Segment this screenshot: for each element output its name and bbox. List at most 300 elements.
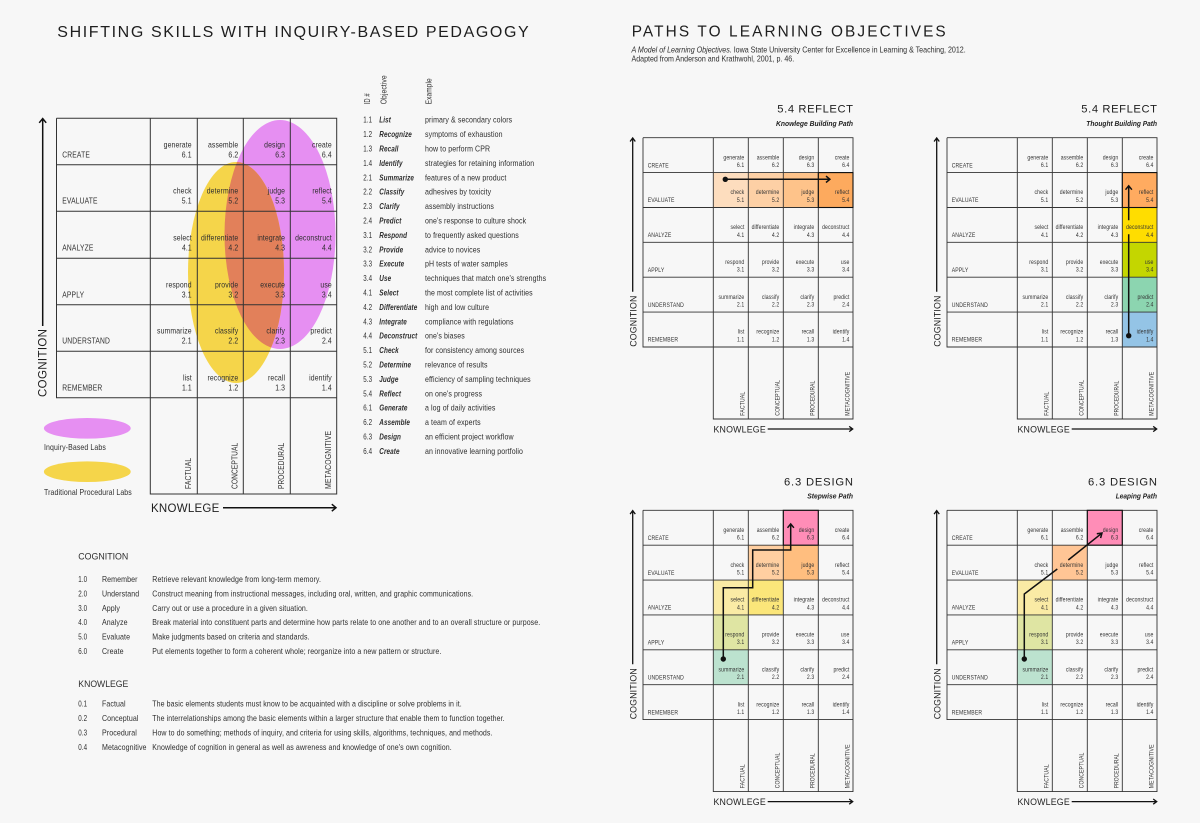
column: id numbers: 6.1 <box>363 403 372 413</box>
row: understand: 2.3 <box>275 336 286 346</box>
grid labels: ANALYZE <box>648 605 671 612</box>
grid labels: 6.3 <box>807 163 814 169</box>
column: objectives: Recall <box>379 144 399 154</box>
grid labels: recognize <box>756 329 779 336</box>
grid labels: FACTUAL <box>739 391 746 416</box>
row: analyze: 4.4 <box>322 243 332 253</box>
grid labels: select <box>731 225 744 231</box>
grid labels: list <box>1042 329 1048 336</box>
grid labels: determine <box>756 190 779 196</box>
grid labels: provide <box>762 259 779 266</box>
grid labels: 5.2 <box>772 197 779 204</box>
column: id numbers <box>363 115 372 456</box>
grid labels: use <box>841 632 849 639</box>
knowlege descriptions: The basic elements students must know to be acquainted with a discipline or solve problems in it. <box>152 699 462 709</box>
cognition ids: 3.0 <box>78 603 87 613</box>
row: remember: recall <box>268 373 285 383</box>
grid labels: 5.1 <box>737 570 744 577</box>
column: objectives: Select <box>379 288 399 298</box>
grid labels: METACOGNITIVE <box>844 744 851 788</box>
grid labels: PROCEDURAL <box>809 380 816 416</box>
highlighted cells <box>1017 510 1122 685</box>
grid labels: METACOGNITIVE <box>1148 371 1155 416</box>
grid labels: 1.2 <box>772 710 779 716</box>
grid labels: identify <box>1137 329 1153 336</box>
column: examples: strategies for retaining information <box>425 158 534 168</box>
row: create: 6.1 <box>182 150 192 160</box>
path arrow <box>1126 186 1132 338</box>
knowlege descriptions <box>152 699 505 752</box>
row: understand: 2.1 <box>182 336 192 346</box>
panel: 5.4 reflect, knowlege building path <box>628 104 853 434</box>
column: id numbers: 2.2 <box>363 187 372 197</box>
row: evaluate: 5.1 <box>182 196 192 206</box>
grid labels: METACOGNITIVE <box>1148 744 1155 788</box>
path arrow <box>721 524 794 662</box>
grid labels: check <box>1035 562 1048 569</box>
axis: knowlege: KNOWLEGE <box>151 503 220 515</box>
grid labels: summarize <box>719 294 744 301</box>
axis: knowlege <box>1018 424 1157 434</box>
grid labels: CONCEPTUAL <box>1078 752 1085 788</box>
grid labels: 3.2 <box>772 267 779 274</box>
column: id numbers: 1.1 <box>363 115 372 125</box>
grid labels: 4.4 <box>1146 605 1154 612</box>
grid labels: 2.1 <box>1041 302 1048 309</box>
grid labels: 1.3 <box>807 710 814 716</box>
column: examples <box>425 115 546 456</box>
grid labels: classify <box>762 294 779 301</box>
column: objectives: Summarize <box>379 172 414 183</box>
knowlege names <box>102 699 147 752</box>
grid labels: 1.1 <box>1041 710 1048 716</box>
row: remember: 1.3 <box>275 383 286 393</box>
grid labels: CREATE <box>952 535 973 542</box>
table header: Objective <box>379 75 389 104</box>
grid labels: 3.2 <box>1076 267 1083 274</box>
grid labels: classify <box>762 667 779 674</box>
subheading: Leaping Path <box>1116 492 1157 501</box>
grid labels: design <box>799 527 814 534</box>
grid labels: judge <box>801 562 814 569</box>
ellipse: inquiry-based labs <box>224 120 336 349</box>
grid labels: design <box>1103 527 1118 534</box>
grid labels: 2.1 <box>737 675 744 681</box>
grid labels: create <box>1139 527 1153 534</box>
grid labels: reflect <box>1139 190 1153 196</box>
grid labels: 2.3 <box>1111 675 1118 681</box>
grid labels: 3.4 <box>842 267 850 274</box>
grid labels: check <box>1035 190 1048 196</box>
grid labels: summarize <box>719 667 744 674</box>
table header: Example <box>424 78 434 104</box>
column: objectives: Reflect <box>379 388 401 399</box>
grid labels: 4.1 <box>737 232 744 239</box>
grid labels: CREATE <box>648 163 669 170</box>
knowlege ids: 0.4 <box>78 742 87 752</box>
row: create: generate <box>164 140 192 150</box>
column: id numbers: 3.2 <box>363 244 372 255</box>
column: id numbers: 3.3 <box>363 259 372 269</box>
grid labels: 2.4 <box>1146 302 1154 309</box>
cognition names: Remember <box>102 574 138 584</box>
grid labels: 4.1 <box>1041 605 1048 612</box>
grid labels: identify <box>833 329 849 336</box>
citation text: Adapted from Anderson and Krathwohl, 2001, p. 46. <box>632 54 794 64</box>
row: remember: list <box>183 373 192 383</box>
row: understand: 2.4 <box>322 336 332 346</box>
cognition descriptions: Construct meaning from instructional messages, including oral, written, and graphic communications. <box>152 589 473 599</box>
grid labels: select <box>731 597 744 604</box>
grid labels: CONCEPTUAL <box>1078 380 1085 416</box>
grid labels: CREATE <box>952 163 973 170</box>
column: id numbers: 4.2 <box>363 302 372 312</box>
axis: cognition <box>38 119 50 397</box>
target cell outline <box>1122 173 1157 208</box>
row: analyze: 4.3 <box>275 243 286 253</box>
grid labels: respond <box>1029 259 1048 266</box>
cognition ids: 5.0 <box>78 632 87 642</box>
column: objectives: Use <box>379 273 391 283</box>
cognition ids: 1.0 <box>78 574 87 584</box>
path arrow <box>723 176 830 182</box>
row: apply: APPLY <box>62 290 84 300</box>
knowlege ids: 0.3 <box>78 728 87 738</box>
grid labels: recall <box>802 702 814 709</box>
knowlege names: Conceptual <box>102 714 139 723</box>
grid labels: reflect <box>1139 562 1153 569</box>
grid labels: 5.4 <box>1146 197 1154 204</box>
column: examples: an efficient project workflow <box>425 432 514 442</box>
cognition descriptions: Put elements together to form a coherent whole; reorganize into a new pattern or structure. <box>152 646 441 656</box>
row: understand: UNDERSTAND <box>62 336 110 346</box>
grid labels: 6.2 <box>1076 535 1083 542</box>
row: understand <box>62 326 332 346</box>
grid labels: PROCEDURAL <box>1113 753 1120 788</box>
row: evaluate <box>62 186 332 206</box>
grid labels: CONCEPTUAL <box>774 752 781 788</box>
grid labels: differentiate <box>752 225 779 231</box>
column: examples: assembly instructions <box>425 201 494 211</box>
column: objectives: Execute <box>379 259 404 269</box>
column: examples: on one's progress <box>425 389 482 398</box>
knowlege ids <box>78 699 87 752</box>
column: objectives: Respond <box>379 230 407 240</box>
row: analyze: differentiate <box>201 233 238 243</box>
grid labels: recognize <box>756 702 779 709</box>
column: id numbers: 5.3 <box>363 374 372 384</box>
grid labels: CREATE <box>648 535 669 542</box>
grid labels: predict <box>834 667 849 674</box>
grid labels: 5.3 <box>1111 197 1118 204</box>
grid labels: 6.2 <box>1076 163 1083 169</box>
grid labels: assemble <box>1061 527 1083 534</box>
grid labels: 2.3 <box>1111 302 1118 309</box>
grid labels: 6.4 <box>1146 535 1154 542</box>
grid labels: differentiate <box>752 597 779 604</box>
grid labels: assemble <box>1061 155 1083 162</box>
grid labels: EVALUATE <box>648 198 675 204</box>
axis: knowlege <box>714 424 853 434</box>
heading: 6.3 design: 6.3 DESIGN <box>784 476 853 488</box>
grid labels: 6.2 <box>772 163 779 169</box>
column: id numbers: 2.3 <box>363 201 372 211</box>
grid labels: integrate <box>1098 225 1118 231</box>
grid labels: 1.4 <box>842 337 850 344</box>
grid labels: assemble <box>757 527 779 534</box>
grid labels: 6.1 <box>1041 163 1048 169</box>
column: id numbers: 3.1 <box>363 230 372 240</box>
grid labels: determine <box>756 562 779 569</box>
column: examples: one's biases <box>425 331 465 341</box>
column: examples: advice to novices <box>425 245 480 254</box>
grid labels: 6.4 <box>842 535 850 542</box>
grid labels: generate <box>723 155 744 162</box>
grid labels: EVALUATE <box>952 570 979 577</box>
column: id numbers: 4.4 <box>363 331 372 341</box>
grid labels: 2.4 <box>842 302 850 309</box>
target cell outline <box>818 173 853 208</box>
target cell outline <box>783 510 818 545</box>
column: examples: efficiency of sampling techniques <box>425 374 531 384</box>
column: id numbers: 5.1 <box>363 345 372 355</box>
grid labels: differentiate <box>1056 597 1083 604</box>
column: id numbers: 1.3 <box>363 143 372 154</box>
grid labels: 1.3 <box>807 337 814 344</box>
row: remember: 1.1 <box>182 383 192 393</box>
column labels: PROCEDURAL <box>276 443 286 489</box>
grid labels: respond <box>1029 632 1048 639</box>
row: evaluate: reflect <box>312 186 332 196</box>
column: objectives: Create <box>379 446 400 456</box>
grid labels: 3.3 <box>1111 267 1118 274</box>
row: create: design <box>264 140 285 150</box>
heading: 6.3 design: 6.3 DESIGN <box>1088 476 1157 488</box>
legend: traditional procedural labs: Traditional Procedural Labs <box>44 487 132 497</box>
column: examples: an innovative learning portfolio <box>425 446 523 456</box>
row: understand: 2.2 <box>228 336 238 346</box>
row: create: create <box>312 140 332 150</box>
citation text <box>631 44 966 64</box>
grid labels: FACTUAL <box>1043 764 1050 788</box>
axis: knowlege: KNOWLEGE <box>1018 424 1070 434</box>
column: objectives: Determine <box>379 360 411 370</box>
column: id numbers: 4.1 <box>363 287 372 298</box>
cognition names: Create <box>102 646 124 656</box>
grid labels: 4.2 <box>772 605 779 612</box>
grid labels: generate <box>1027 155 1048 162</box>
grid labels: determine <box>1060 190 1083 196</box>
legend <box>44 418 132 497</box>
column: objectives: List <box>379 115 391 125</box>
column: objectives: Provide <box>379 244 403 255</box>
row: remember: REMEMBER <box>62 383 103 393</box>
grid labels: 3.4 <box>842 640 850 646</box>
row: remember: recognize <box>207 373 238 383</box>
row: apply: use <box>320 280 332 290</box>
grid labels: predict <box>834 294 849 301</box>
grid labels: 2.2 <box>1076 302 1083 309</box>
grid labels: 6.3 <box>1111 535 1118 542</box>
axis: cognition <box>628 511 638 719</box>
grid labels: CONCEPTUAL <box>774 380 781 416</box>
row: analyze: 4.2 <box>228 243 238 253</box>
grid labels: REMEMBER <box>648 710 678 717</box>
grid labels: 3.1 <box>1041 267 1048 274</box>
grid labels <box>952 155 1155 416</box>
column: examples: features of a new product <box>425 173 507 182</box>
grid labels: differentiate <box>1056 225 1083 231</box>
grid labels: 5.4 <box>842 570 850 577</box>
axis: knowlege <box>714 797 853 807</box>
panel: 5.4 reflect, thought building path <box>932 104 1157 434</box>
grid labels: deconstruct <box>822 225 849 231</box>
axis: knowlege <box>151 503 336 515</box>
panel: 6.3 design, stepwise path <box>628 476 853 807</box>
grid labels: UNDERSTAND <box>648 675 684 682</box>
grid labels: 1.1 <box>737 337 744 344</box>
column labels <box>183 431 333 489</box>
column: id numbers: 1.2 <box>363 129 372 139</box>
panel: 6.3 design, leaping path <box>932 476 1157 807</box>
grid labels: integrate <box>794 225 814 231</box>
column: examples: relevance of results <box>425 360 488 370</box>
column: objectives: Check <box>379 345 399 355</box>
grid labels: respond <box>725 632 744 639</box>
grid labels: identify <box>833 702 849 709</box>
column: objectives: Differentiate <box>379 302 417 312</box>
row: evaluate: judge <box>268 186 285 196</box>
column: objectives: Recognize <box>379 129 412 139</box>
grid labels: 6.4 <box>1146 163 1154 169</box>
heading: cognition: COGNITION <box>78 551 128 561</box>
grid labels: 6.3 <box>1111 163 1118 169</box>
cognition descriptions: Make judgments based on criteria and standards. <box>152 632 310 642</box>
grid labels: recognize <box>1060 702 1083 709</box>
cognition names: Analyze <box>102 618 128 627</box>
grid labels: provide <box>1066 632 1083 639</box>
column: examples: compliance with regulations <box>425 317 514 326</box>
grid labels: 5.2 <box>1076 570 1083 577</box>
grid labels: execute <box>1100 632 1118 639</box>
grid labels: 3.3 <box>807 640 814 646</box>
column: objectives: Predict <box>379 216 402 226</box>
grid labels: 5.4 <box>1146 570 1154 577</box>
grid labels: 6.1 <box>737 535 744 542</box>
row: apply: 3.3 <box>275 290 286 300</box>
highlighted cells <box>1122 173 1157 347</box>
heading: knowlege: KNOWLEGE <box>78 679 128 689</box>
row: evaluate: determine <box>207 186 238 196</box>
grid labels: 4.3 <box>807 232 814 239</box>
grid labels: 5.1 <box>1041 570 1048 577</box>
column: id numbers: 3.4 <box>363 273 372 283</box>
grid labels: create <box>835 155 849 162</box>
grid labels: design <box>1103 155 1118 162</box>
grid labels <box>952 527 1155 788</box>
grid labels: REMEMBER <box>648 337 678 344</box>
grid labels: judge <box>801 190 814 196</box>
ellipse overlap <box>224 162 284 348</box>
grid lines <box>643 138 853 419</box>
knowlege descriptions: Knowledge of cognition in general as well as awreness and knowledge of one's own cognition. <box>152 742 452 752</box>
grid lines <box>947 510 1157 792</box>
table: objectives and examples <box>362 75 546 456</box>
row: analyze: integrate <box>257 233 285 243</box>
grid labels: recall <box>802 329 814 336</box>
knowlege ids: 0.2 <box>78 713 87 723</box>
row: analyze <box>62 233 332 253</box>
grid labels: 5.1 <box>737 197 744 204</box>
row: evaluate: 5.4 <box>322 196 332 206</box>
row: analyze: ANALYZE <box>62 243 93 253</box>
grid labels: 2.4 <box>842 675 850 681</box>
grid labels: execute <box>796 632 814 639</box>
grid labels: 4.3 <box>807 605 814 612</box>
subheading: Stepwise Path <box>807 492 853 501</box>
column: objectives: Clarify <box>379 201 400 211</box>
grid labels: determine <box>1060 562 1083 569</box>
grid labels: 3.1 <box>737 267 744 274</box>
axis: cognition: COGNITION <box>628 296 638 347</box>
column: id numbers: 6.3 <box>363 431 372 442</box>
knowlege names: Metacognitive <box>102 742 147 752</box>
row: understand: predict <box>310 326 332 336</box>
row: evaluate: EVALUATE <box>62 196 98 206</box>
column: objectives: Identify <box>379 158 403 168</box>
cognition names: Evaluate <box>102 632 130 642</box>
axis: cognition: COGNITION <box>932 668 942 719</box>
row: create: 6.3 <box>275 150 286 160</box>
column: objectives: Assemble <box>378 417 410 427</box>
grid labels: APPLY <box>952 267 968 274</box>
knowlege descriptions: How to do something; methods of inquiry, and criteria for using skills, algorithms, techniques, and methods. <box>152 728 493 738</box>
grid labels: execute <box>796 259 814 266</box>
column: id numbers: 2.4 <box>363 215 372 226</box>
column: examples: how to perform CPR <box>425 144 490 154</box>
grid labels: 5.3 <box>807 197 814 204</box>
grid labels: 4.1 <box>737 605 744 612</box>
cognition descriptions <box>152 574 540 656</box>
grid labels: APPLY <box>648 640 664 647</box>
grid labels: clarify <box>800 667 814 674</box>
grid labels: design <box>799 155 814 162</box>
grid labels: PROCEDURAL <box>809 753 816 788</box>
column: examples: high and low culture <box>425 302 489 312</box>
grid labels: 3.1 <box>737 640 744 646</box>
grid labels: 4.2 <box>772 232 779 239</box>
grid labels: 1.2 <box>772 337 779 344</box>
column: examples: primary & secondary colors <box>425 115 512 125</box>
row: apply: execute <box>260 280 285 290</box>
grid labels: 1.4 <box>1146 710 1154 716</box>
column labels: CONCEPTUAL <box>230 443 240 489</box>
grid labels: predict <box>1138 667 1153 674</box>
grid labels: 3.2 <box>1076 640 1083 646</box>
grid labels: check <box>731 190 744 196</box>
grid labels: assemble <box>757 155 779 162</box>
row: analyze: deconstruct <box>295 233 332 243</box>
grid labels: reflect <box>835 562 849 569</box>
axis: cognition <box>932 138 942 347</box>
grid labels: 4.2 <box>1076 232 1083 239</box>
grid labels: 2.3 <box>807 302 814 309</box>
column: id numbers: 2.1 <box>363 172 372 183</box>
grid labels: 4.4 <box>842 232 850 239</box>
column: id numbers: 6.2 <box>363 417 372 427</box>
ellipse: traditional procedural labs <box>188 162 284 383</box>
grid labels: 2.1 <box>1041 675 1048 681</box>
